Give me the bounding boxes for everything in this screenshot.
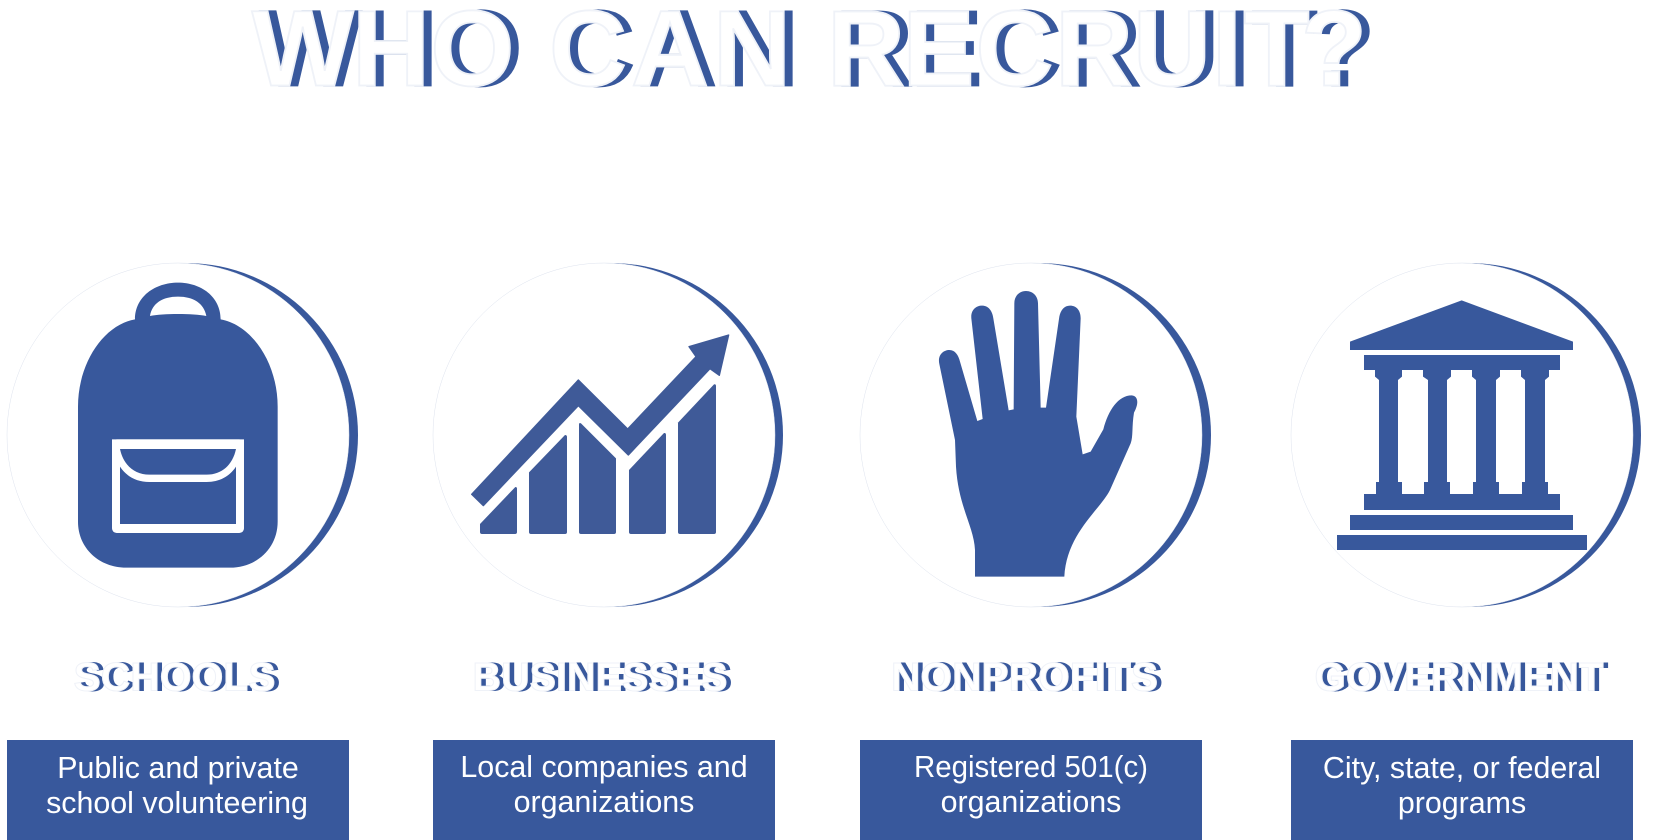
heading: nonprofits: NONPROFITS: [891, 656, 1158, 700]
description box: businesses: organizations: [514, 785, 694, 819]
heading: businesses: BUSINESSES: [477, 656, 732, 700]
panel: schools: [7, 263, 358, 840]
description box: nonprofits: [860, 740, 1202, 840]
icon: businesses circle: [433, 263, 783, 607]
icon: government circle: [1291, 263, 1641, 607]
description box: schools: school volunteering: [46, 786, 308, 820]
icon: rising bar chart: [472, 335, 729, 534]
description box: businesses: Local companies and: [460, 750, 748, 784]
heading: government: GOVERNMENT: [1314, 656, 1604, 700]
heading: schools: SCHOOLS: [74, 656, 276, 700]
icon: raised hand: [939, 291, 1137, 577]
icon: backpack: [78, 283, 278, 568]
panel: nonprofits: [860, 263, 1211, 840]
description box: government: programs: [1398, 786, 1526, 820]
panel: businesses: [433, 263, 783, 840]
heading: government: GOVERNMENT: [1319, 656, 1608, 700]
heading: schools: SCHOOLS: [78, 656, 280, 700]
icon: nonprofits circle: [860, 263, 1211, 607]
panel: government: [1291, 263, 1641, 840]
description box: schools: [7, 740, 349, 840]
description box: government: [1291, 740, 1633, 840]
description box: businesses: [433, 740, 775, 840]
heading: nonprofits: NONPROFITS: [896, 656, 1162, 700]
description box: nonprofits: organizations: [941, 785, 1121, 819]
icon: schools circle: [7, 263, 358, 607]
description box: nonprofits: Registered 501(c): [914, 750, 1148, 784]
heading: businesses: BUSINESSES: [472, 656, 728, 700]
description box: government: City, state, or federal: [1323, 751, 1601, 785]
description box: schools: Public and private: [57, 751, 299, 785]
icon: columned building: [1337, 300, 1587, 550]
